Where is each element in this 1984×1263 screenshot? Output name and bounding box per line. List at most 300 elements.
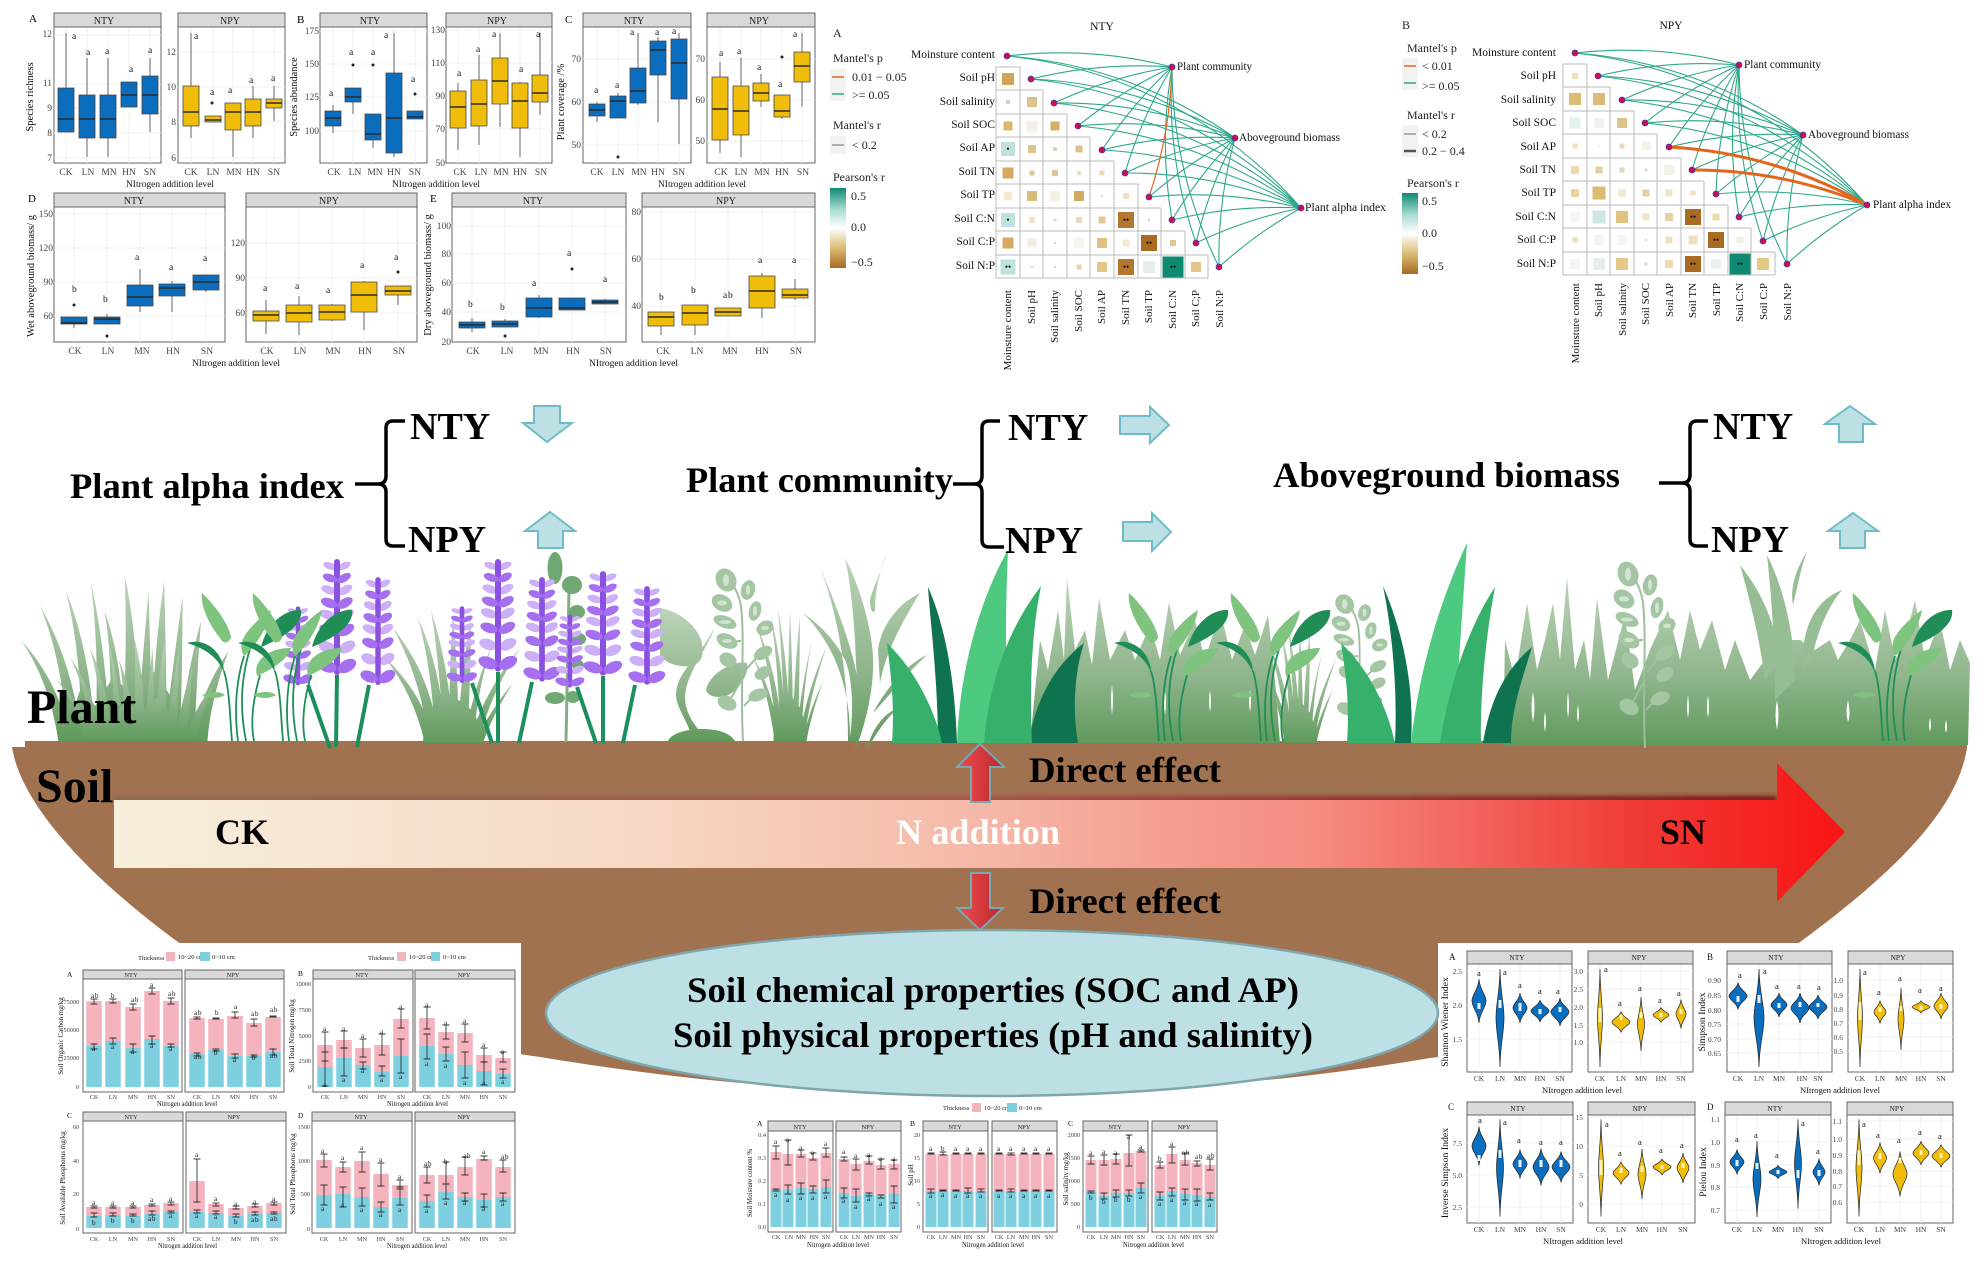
row labels A: Soil pH [960,72,995,84]
bars B NPY pH: HN [1032,1234,1041,1241]
panel letters [1448,952,1714,1112]
bars B NTY pH: 10 [914,1178,920,1185]
violin B NPY Simpson: 1.0 [1834,976,1843,985]
row labels B: Moinsture content [1472,47,1557,59]
bars B NPY total nitrogen: LN [442,1094,451,1101]
bars A NTY organic carbon: 0 [76,1084,79,1091]
bars C NTY available phosphorus: LN [109,1236,118,1243]
bars A NTY organic carbon: HN [148,1094,157,1101]
target labels B [1744,59,1951,211]
violin A NPY Shannon: CK [1595,1074,1606,1083]
panel letters: A [1449,952,1456,962]
panel letters: D [1707,1102,1714,1112]
row labels B: Soil TP [1521,187,1556,199]
mantel legend A: 0.5 [851,189,866,203]
boxplot C NPY plant coverage: CK [714,168,728,178]
boxplot A NTY species richness: NTY [94,16,114,27]
bars C NTY salinity [1062,1121,1148,1241]
bars A NTY organic carbon [57,970,182,1101]
boxplot D NTY wet biomass: 90 [44,278,53,288]
boxplot C NPY plant coverage: MN [754,168,770,178]
violin B NTY Simpson: 0.85 [1708,991,1721,1000]
label: Plant: Plant [27,681,136,734]
bars B NPY pH: aaaaa [997,1192,1051,1200]
mantel legend B: 0.2 − 0.4 [1422,144,1465,158]
bars C NPY salinity: SN [1206,1234,1214,1241]
violin B NPY Simpson: 0.6 [1834,1033,1843,1042]
violin C NPY Inverse Simpson: 5 [1579,1171,1583,1180]
bars A NTY moisture: aaaaa [774,1136,828,1157]
boxplot C NTY plant coverage: NTY [624,16,644,27]
column labels B [1570,283,1794,363]
violin A NPY Shannon: HN [1656,1074,1667,1083]
panel letters: B [1707,952,1713,962]
target labels B: Aboveground biomass [1808,129,1910,141]
violin D NTY Pielou [1698,1102,1831,1234]
violin A NPY Shannon: aaaaa [1604,964,1681,1008]
column labels B: Soil C:P [1758,283,1770,320]
legend thickness left [138,952,235,962]
boxplot D NPY wet biomass: 120 [231,239,245,249]
boxplot D NTY wet biomass: MN [134,347,150,357]
mantel legend A: A [833,26,842,40]
bars B NTY pH: LN [939,1234,948,1241]
bars B NTY total nitrogen: 7500 [299,1007,311,1014]
mantel legend A: 0.01 − 0.05 [852,70,907,84]
violin C NPY Inverse Simpson: HN [1657,1225,1668,1234]
arrow up NTY [1825,406,1875,442]
violin A NTY Shannon: aaaaa [1477,967,1560,996]
mantel legend B: Pearson's r [1407,176,1459,190]
legend thickness right [368,952,466,962]
violin D NPY Pielou: 0.6 [1833,1198,1842,1207]
mantel legend B: Mantel's r [1407,108,1455,122]
boxplot B NTY species abundance: NTY [360,16,380,27]
bars C NPY available phosphorus: CK [193,1236,202,1243]
mantel legend A: −0.5 [851,255,873,269]
boxplot A NPY species richness: MN [226,168,242,178]
column labels A: Soil TN [1120,290,1132,325]
bars C NTY salinity: NTY [1108,1124,1122,1131]
white backing of soil chart blocks [0,943,1984,1263]
x title E: NItrogen addition level [589,359,678,369]
bars A NPY moisture: LN [852,1234,861,1241]
boxplot C NTY plant coverage: HN [651,168,665,178]
violin A NTY Shannon: 1.5 [1453,1035,1462,1044]
violin A NTY Shannon: Shannon Wiener Index [1440,977,1451,1067]
boxplot D NTY wet biomass: LN [102,347,114,357]
violin D NTY Pielou: LN [1752,1225,1763,1234]
grass tufts [22,552,1970,750]
boxplot E NTY dry biomass: CK [466,347,480,357]
boxplot E NTY dry biomass: 100 [437,222,451,232]
heatmap cells A [1005,79,1196,272]
bars A NPY organic carbon [185,970,284,1101]
boxplot E NPY dry biomass: 60 [632,255,641,265]
mantel legend B: < 0.01 [1422,59,1453,73]
bars B NTY total nitrogen: aaaaa [323,1003,403,1040]
legend thickness right: 10~20 cm [409,954,435,961]
boxplot A NPY species richness: LN [207,168,219,178]
violin B NPY Simpson: CK [1855,1074,1866,1083]
bars A NTY moisture: NTY [793,1124,807,1131]
boxplot A NTY species richness: aaaaa [72,32,153,75]
violin D NTY Pielou: 0.8 [1711,1183,1720,1192]
bars B NTY pH: SN [977,1234,985,1241]
bars A NTY moisture: 0.2 [758,1178,766,1185]
bars A NTY moisture: Soil Moisture content % [746,1149,754,1217]
bars D NTY total phosphorus: Soil Total Phosphorus mg/kg [289,1133,297,1215]
column labels B: Soil N:P [1782,283,1794,321]
bars A NPY moisture: NPY [861,1124,875,1131]
boxplot D NPY wet biomass [231,193,417,357]
boxplot B NTY species abundance: MN [367,168,383,178]
target labels A: Plant alpha index [1305,202,1386,214]
mantel links B [1575,50,1867,264]
lavender plants [282,560,668,748]
bars C NPY salinity: NPY [1177,1124,1191,1131]
panel letters: C [1448,1102,1454,1112]
bars C NTY available phosphorus: NTY [124,1114,138,1121]
boxplot D NTY wet biomass: HN [166,347,180,357]
mantel legend A [830,26,907,269]
x title bars moisture: Nitrogen addition level [807,1241,869,1249]
boxplot A NPY species richness: 12 [166,48,176,58]
boxplot A NPY species richness: 10 [166,83,176,93]
boxplot D NPY wet biomass: HN [358,347,372,357]
bars A NTY organic carbon: 25000 [64,1055,79,1062]
bars D NPY total phosphorus: aaaaa [425,1199,505,1215]
boxplot D NTY wet biomass: 150 [39,210,53,220]
column labels B: Moinsture content [1570,283,1582,363]
violin C NPY Inverse Simpson: CK [1596,1225,1607,1234]
legend thickness right: Thickness [368,955,395,962]
bars A NTY organic carbon: SN [167,1094,175,1101]
violin A NTY Shannon: HN [1535,1074,1546,1083]
violin B NPY Simpson: 0.8 [1834,1005,1843,1014]
violin A NPY Shannon: NPY [1631,953,1647,962]
boxplot A NPY species richness: 6 [171,154,176,164]
bars D NPY total phosphorus [415,1112,515,1243]
bars D NTY total phosphorus: 1500 [298,1124,310,1131]
boxplot B NTY species abundance: 175 [305,27,319,37]
bars D NPY total phosphorus: SN [499,1236,507,1243]
boxplot D NTY wet biomass: NTY [124,196,144,207]
x title bars C: Nitrogen addition level [158,1242,217,1250]
boxplot E NTY dry biomass: 60 [442,279,451,289]
boxplot A NTY species richness: 11 [43,79,52,89]
boxplots: plant species and biomass [25,13,815,369]
N addition gradient arrow [114,763,1845,902]
bars C NTY salinity: 1500 [1068,1155,1080,1162]
bars A NTY moisture: 0.4 [758,1132,766,1139]
node markers B [1572,50,1870,267]
arrow right NPY [1123,513,1171,551]
violin C NPY Inverse Simpson: MN [1636,1225,1649,1234]
violin C NTY Inverse Simpson: NTY [1510,1104,1526,1113]
mantel legend B: Mantel's p [1407,41,1457,55]
bars C NTY available phosphorus: SN [167,1236,175,1243]
mantel legend B: >= 0.05 [1422,79,1460,93]
bars A NPY organic carbon: LN [212,1094,221,1101]
bars B NTY pH: CK [927,1234,936,1241]
bars B NPY pH: aaaaa [997,1145,1051,1153]
violin D NPY Pielou: MN [1894,1225,1907,1234]
bars A NTY moisture: 0.1 [758,1201,766,1208]
violin A NTY Shannon: 2.0 [1453,1001,1462,1010]
bars B NTY total nitrogen: 2500 [299,1058,311,1065]
mantel legend B: 0.0 [1422,226,1437,240]
heatmap cells A: •• [1005,262,1011,272]
bars D NPY total phosphorus: abbabaab [424,1148,509,1168]
bars C NPY salinity: HN [1193,1234,1202,1241]
violin B NPY Simpson: HN [1916,1074,1927,1083]
boxplot D NPY wet biomass: 90 [236,274,245,284]
snail-like plant [660,608,747,741]
violin B NPY Simpson: SN [1936,1074,1946,1083]
panel letters: C [1068,1119,1073,1128]
violin D NPY Pielou: aaaaa [1862,1119,1942,1145]
bars C NTY salinity: Soil salinity mg/kg [1062,1152,1070,1206]
target labels A: Aboveground biomass [1239,132,1341,144]
bars A NTY organic carbon: aaaaa [92,1042,173,1056]
violin B NTY Simpson: LN [1754,1074,1765,1083]
legend thickness middle: 10~20 cm [984,1105,1010,1112]
violin B NPY Simpson: MN [1895,1074,1908,1083]
boxplot D NTY wet biomass: CK [68,347,82,357]
row labels A: Soil TN [958,166,996,178]
boxplot B NPY species abundance: LN [475,168,487,178]
bars C NPY salinity: baababab [1158,1140,1215,1163]
violin D NPY Pielou: LN [1875,1225,1886,1234]
heatmap cells B: •• [1737,259,1743,269]
boxplot A NPY species richness: NPY [220,16,240,27]
boxplot C NPY plant coverage: HN [775,168,789,178]
violin D NTY Pielou: SN [1814,1225,1824,1234]
heatmap cells A: •• [1146,238,1152,248]
bars D NTY total phosphorus: LN [339,1236,348,1243]
bars B NTY total nitrogen: 5000 [299,1033,311,1040]
bars A NTY organic carbon: NTY [124,972,138,979]
violin A NTY Shannon: MN [1514,1074,1527,1083]
boxplot A NPY species richness: SN [268,168,280,178]
bars B NPY pH: LN [1007,1234,1016,1241]
arrow: direct effect down to soil [957,873,1003,930]
violin D NTY Pielou: 1.0 [1711,1138,1720,1147]
column labels A: Soil AP [1096,290,1108,324]
bars A NTY organic carbon: CK [90,1094,99,1101]
boxplot C NTY plant coverage: 60 [572,98,581,108]
bars C NPY salinity [1152,1121,1217,1241]
bars D NTY total phosphorus [289,1112,412,1243]
bars B NTY total nitrogen: SN [397,1094,405,1101]
bars D NPY total phosphorus: CK [423,1236,432,1243]
summary: Aboveground biomass [1273,406,1878,561]
bars A NTY moisture: aaaaa [774,1191,828,1204]
row labels B: Soil C:N [1515,211,1557,223]
x title violin A: NItrogen addition level [1542,1085,1623,1095]
bars C NPY salinity: aaaaa [1158,1196,1212,1209]
boxplot A NTY species richness: MN [101,168,117,178]
bars A NPY moisture [836,1121,901,1241]
bars C NTY salinity: 0 [1077,1224,1080,1231]
bars A NTY moisture: CK [772,1234,781,1241]
violin C NPY Inverse Simpson: NPY [1632,1104,1648,1113]
bars C NPY salinity: LN [1168,1234,1177,1241]
bars C NTY available phosphorus: CK [90,1236,99,1243]
boxplot B NPY species abundance: CK [453,168,467,178]
mantel legend A: >= 0.05 [852,88,890,102]
stacked bars: soil moisture pH salinity [746,1103,1217,1249]
heatmap cells A: •• [1123,262,1129,272]
bars B NPY pH [992,1121,1057,1241]
column labels B: Soil TP [1711,283,1723,316]
bars A NPY organic carbon: abbabab [194,1049,278,1064]
violin C NPY Inverse Simpson: LN [1616,1225,1627,1234]
arrow: direct effect up to plants [957,744,1004,802]
violin C NTY Inverse Simpson: Inverse Simpson Index [1440,1128,1451,1218]
bars C NPY available phosphorus: SN [270,1236,278,1243]
label NPY: NPY [1711,519,1789,561]
boxplot D NTY wet biomass: 120 [39,244,53,254]
violin B NTY Simpson: 0.75 [1708,1020,1721,1029]
boxplot D NPY wet biomass: LN [294,347,306,357]
violin C NTY Inverse Simpson: MN [1514,1225,1527,1234]
boxplot D NTY wet biomass: Wet aboveground biomass/ g [26,214,37,337]
bars A NTY moisture: MN [796,1234,807,1241]
heatmap grid B [1563,64,1775,275]
bars D NPY total phosphorus: HN [480,1236,489,1243]
violin D NPY Pielou: CK [1854,1225,1865,1234]
column labels A: Soil TP [1143,290,1155,323]
label: Soil: Soil [36,760,113,813]
bars C NTY salinity: MN [1111,1234,1122,1241]
label: CK: CK [215,812,269,852]
mantel legend A: 0.0 [851,220,866,234]
boxplot A NTY species richness: SN [144,168,156,178]
heatmap cells A: •• [1123,215,1129,225]
boxplot D NPY wet biomass: SN [393,347,405,357]
boxplot B NPY species abundance: 70 [436,125,445,135]
violin C NTY Inverse Simpson: CK [1474,1225,1485,1234]
boxplot B NTY species abundance: 100 [305,127,319,137]
bars B NPY pH: MN [1019,1234,1030,1241]
violin C NTY Inverse Simpson: 7.5 [1453,1139,1462,1148]
bars B NTY total nitrogen [288,970,413,1101]
bars B NTY pH: 15 [914,1155,920,1162]
violin A NTY Shannon [1440,951,1572,1083]
panel letters [757,1119,1073,1128]
column labels A: Soil C:N [1167,290,1179,329]
bars B NPY total nitrogen: CK [423,1094,432,1101]
row labels B: Soil salinity [1501,94,1556,106]
bars A NPY organic carbon: CK [193,1094,202,1101]
boxplot E NPY dry biomass: SN [790,347,802,357]
bars C NTY salinity: SN [1137,1234,1145,1241]
legend thickness middle [943,1103,1042,1112]
bars A NPY moisture: SN [890,1234,898,1241]
legend thickness left: 0~10 cm [212,954,235,961]
x title bars D: Nitrogen addition level [387,1242,447,1250]
violin B NPY Simpson: aaaaa [1863,967,1943,997]
violin D NPY Pielou [1833,1102,1953,1234]
boxplot B NPY species abundance: 130 [431,26,445,36]
legend thickness left: Thickness [138,955,165,962]
boxplot B NPY species abundance: 50 [436,159,445,169]
mantel legend B [1402,18,1465,274]
violin B NPY Simpson [1834,951,1953,1083]
violin B NPY Simpson: LN [1875,1074,1886,1083]
translucent vines [708,557,1678,748]
violin A NPY Shannon: 3.0 [1574,967,1583,976]
panel letters: A [757,1119,763,1128]
violin B NTY Simpson: SN [1813,1074,1823,1083]
boxplot A NPY species richness: HN [246,168,260,178]
bars A NTY organic carbon: MN [128,1094,139,1101]
row labels B: Soil N:P [1517,258,1556,270]
boxplot E NTY dry biomass: 80 [442,250,451,260]
violin D NPY Pielou: NPY [1889,1104,1905,1113]
violin B NTY Simpson: 0.90 [1708,976,1721,985]
x title bars pH: Nitrogen addition level [962,1241,1024,1249]
bars C NTY available phosphorus [59,1112,183,1243]
violin B NTY Simpson: 0.65 [1708,1049,1721,1058]
boxplot C NPY plant coverage: aaaaa [719,30,798,90]
row labels A: Soil TP [960,189,995,201]
violin A NPY Shannon: LN [1616,1074,1627,1083]
bars D NTY total phosphorus: 0 [307,1226,310,1233]
boxplot A NTY species richness: CK [59,168,73,178]
bars C NTY salinity: CK [1087,1234,1096,1241]
bars C NTY available phosphorus: bbbaba [92,1212,173,1227]
boxplot E NPY dry biomass: 80 [632,208,641,218]
boxplot A NPY species richness: CK [184,168,198,178]
violin C NTY Inverse Simpson: HN [1536,1225,1547,1234]
boxplot B NPY species abundance: SN [535,168,547,178]
stacked bars: soil carbon nitrogen phosphorus [57,952,515,1250]
bars A NTY organic carbon: 75000 [64,999,79,1006]
boxplot E NPY dry biomass: LN [691,347,703,357]
label NTY: NTY [410,406,490,448]
bars B NPY pH: SN [1045,1234,1053,1241]
bars D NTY total phosphorus: NTY [354,1114,368,1121]
row labels A: Soil SOC [951,119,995,131]
panel letters: B [910,1119,915,1128]
bars B NPY total nitrogen: SN [499,1094,507,1101]
mantel legend B: −0.5 [1422,259,1444,273]
row labels B: Soil SOC [1512,117,1556,129]
boxplot B NTY species abundance: LN [349,168,361,178]
bars A NPY organic carbon: HN [250,1094,259,1101]
x title violin D: NItrogen addition level [1801,1236,1882,1246]
heatmap cells A: •• [1170,262,1176,272]
bars C NPY available phosphorus: aaaaa [195,1151,276,1208]
bars B NTY pH: MN [951,1234,962,1241]
bars B NTY pH: 20 [914,1132,920,1139]
violin D NTY Pielou: 0.9 [1711,1161,1720,1170]
bars B NTY total nitrogen: NTY [355,972,369,979]
bars D NTY total phosphorus: MN [357,1236,368,1243]
label NPY: NPY [1005,520,1083,562]
boxplot A NTY species richness [25,13,161,178]
boxplot C NTY plant coverage: 50 [572,141,581,151]
boxplot C NTY plant coverage: aaaaa [594,27,677,96]
boxplot E NTY dry biomass: SN [600,347,612,357]
correlation heatmap B NPY [1472,20,1951,363]
summary: Plant alpha index [70,406,575,561]
violin A NPY Shannon: 1.5 [1574,1021,1583,1030]
leafy sprouts [187,593,1952,741]
